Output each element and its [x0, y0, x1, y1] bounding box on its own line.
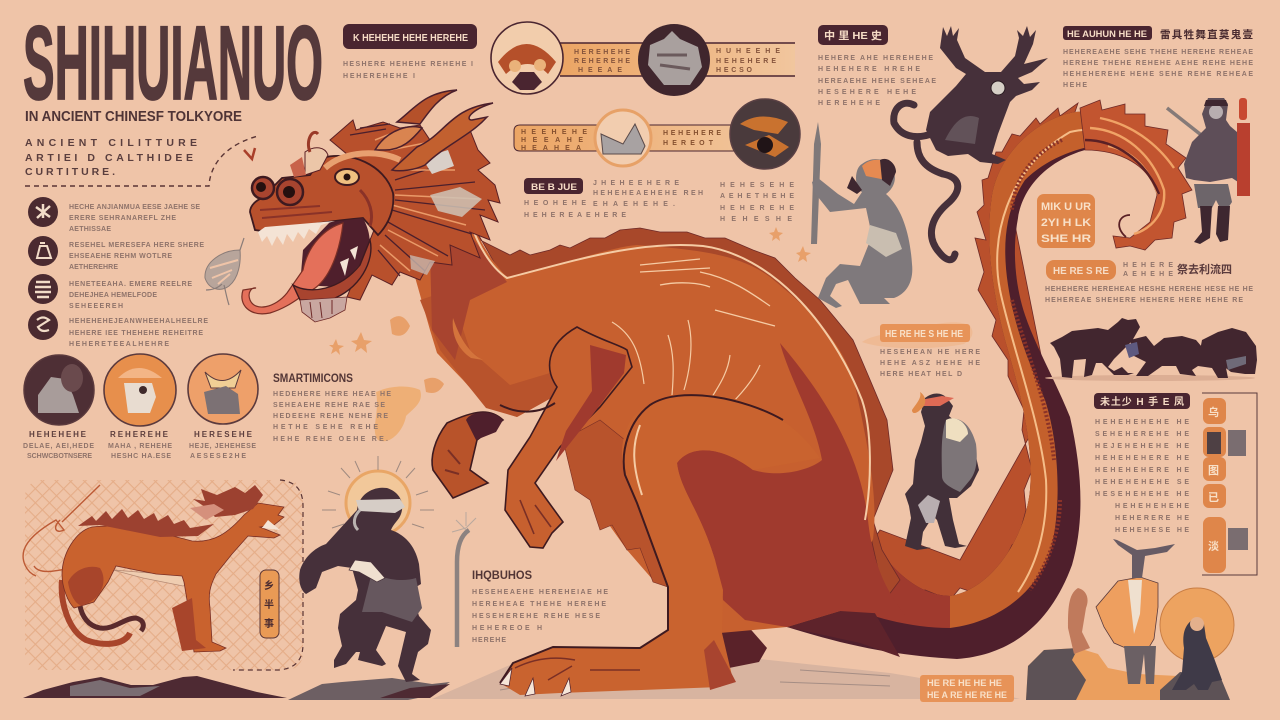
beast body — [62, 503, 284, 652]
seal tag: 乡 — [264, 579, 274, 592]
beast pale belly — [113, 550, 223, 586]
band: upper infographic: HEHEHERE — [716, 58, 776, 65]
icon: leaf sketch — [205, 238, 244, 305]
top centre label — [343, 24, 477, 80]
intro text: CURTITURE. — [25, 166, 115, 178]
text: item four: HEHEHEHEJEANWHEEHALHEELRE — [69, 318, 208, 325]
text group: centre notes: JHEHEEHERE — [593, 180, 679, 187]
panel: small beast — [23, 480, 303, 670]
text group: centre notes: AEHETHEHE — [720, 193, 794, 200]
bottom tag: HE RE HE HE HE — [927, 678, 1002, 688]
text: smartimicons: HEHE REHE OEHE RE. — [273, 436, 388, 443]
body shading — [430, 235, 905, 627]
text: smartimicons: SMARTIMICONS — [273, 373, 353, 385]
intro text — [25, 137, 197, 178]
icon: glyph — [28, 310, 58, 340]
text: item one — [69, 204, 200, 233]
text: inqbuhos: HESEHEREHE REHE HESE — [472, 613, 600, 620]
text: item two: RESEHEL MERESEFA HERE SHERE — [69, 242, 204, 249]
text: item three — [69, 281, 192, 310]
label: notes column: 未土少 H 手 E 凤 — [1100, 395, 1184, 408]
band: upper infographic: HEEAE — [578, 67, 622, 74]
label: caption blob: HERE HEAT HEL D — [880, 371, 962, 378]
text: item three: DEHEJHEA HEMELFODE — [69, 292, 157, 299]
text: smartimicons — [273, 373, 421, 443]
label: right notes: HE RE S RE — [1053, 265, 1109, 277]
figure body — [1184, 98, 1248, 244]
top centre label: HESHERE HEHEHE REHEHE I — [343, 61, 473, 68]
standing ape — [905, 392, 979, 550]
captions: SCHWCBOTNSERE — [27, 453, 92, 460]
intro text: ANCIENT CILITTURE — [25, 137, 197, 149]
text group: centre notes: HEHEREAEHERE — [524, 212, 626, 219]
label: right notes: HEHEHERE HEREHEAE HESHE HEREHE HESE HE HE — [1045, 286, 1253, 293]
text: right top: HEHEHERE HREHE — [818, 66, 920, 73]
text: SHIHUIANUO — [23, 5, 323, 122]
beast row — [1045, 318, 1257, 381]
text group: centre notes: HEOHEHE — [524, 200, 586, 207]
staff — [1167, 108, 1205, 138]
label: caption blob: HEHE ASZ HEHE HE — [880, 360, 980, 367]
tall figure — [1096, 539, 1175, 684]
tail tuft — [1080, 100, 1192, 250]
orange tag: MIK U UR — [1041, 201, 1091, 213]
orange tag — [1037, 194, 1095, 248]
curling tail — [894, 103, 958, 260]
label: notes column: HESEHEHEHE HE — [1095, 491, 1189, 498]
body light lines — [470, 222, 870, 520]
label: notes column: HEJEHEHEHE HE — [1095, 443, 1189, 450]
label: notes column: HEHEHEHEHE — [1115, 503, 1189, 510]
mouth — [258, 218, 370, 287]
monkey body — [812, 159, 912, 308]
icon: stack — [28, 274, 58, 304]
text: right top: HEREHE THEHE REHEHE AEHE REHE HEHE — [1063, 60, 1253, 67]
band: lower infographic — [514, 99, 800, 169]
label: caption blob — [862, 322, 980, 378]
black monkey top — [894, 26, 1048, 260]
icon strip: 已 — [1208, 491, 1219, 504]
text: inqbuhos: HESEHEAEHE HEREHEIAE HE — [472, 589, 608, 596]
ground — [432, 659, 1020, 699]
text: item three: SEHEEEREH — [69, 303, 123, 310]
icon: figure — [28, 197, 58, 227]
hind claws — [500, 668, 571, 696]
text group: centre notes: HEHESEHE — [720, 182, 794, 189]
subtitle: IN ANCIENT CHINESF TOLKYORE — [25, 109, 242, 125]
halo — [322, 456, 434, 535]
icon: vessel — [28, 236, 58, 266]
icon strip: 乌 — [1208, 405, 1219, 419]
figure — [299, 488, 431, 682]
halo figure — [299, 456, 434, 682]
intro text: ARTIEI D CALTHIDEE — [25, 152, 193, 164]
staff sketch — [452, 512, 476, 647]
medallion: grey creature — [638, 24, 710, 96]
orange tag: 2YI H LK — [1041, 217, 1091, 229]
seal tag: 半 — [264, 598, 274, 611]
medallion: white beast — [595, 110, 651, 166]
tail orange band — [840, 112, 1172, 628]
bottom tag: HE A RE HE RE HE — [927, 690, 1007, 700]
band: lower infographic: HEHEHERE — [663, 130, 721, 137]
text: item two: AETHEREHRE — [69, 264, 118, 271]
eye — [335, 169, 359, 185]
orange tag: SHE HR — [1041, 233, 1091, 245]
label: right notes: HEHERE — [1123, 262, 1173, 269]
nostrils — [252, 177, 303, 205]
icon strip — [1202, 393, 1257, 575]
beast tails — [62, 580, 143, 644]
captions: HEHEHEHE — [29, 430, 87, 439]
main dragon — [242, 90, 1192, 696]
label: right notes: 祭去利流四 — [1177, 262, 1232, 276]
label: notes column — [1094, 393, 1190, 534]
horns — [375, 90, 493, 171]
brow crest — [290, 132, 400, 177]
back foreleg — [432, 412, 503, 498]
text: right top: HEHE — [1063, 82, 1087, 89]
band: lower infographic: HEAHEA — [521, 145, 581, 152]
top centre label: HEHEREHEHE I — [343, 73, 415, 80]
text group: centre notes: HEHEHEAEHEHE REH — [593, 190, 703, 197]
captions: MAHA , REHEHE — [108, 443, 172, 450]
portrait: dark figure — [24, 355, 94, 425]
text: right top: HEREHEHE — [818, 100, 880, 107]
text: smartimicons: HETHE SEHE REHE — [273, 424, 378, 431]
dashed callout line — [25, 136, 258, 186]
captions: AESESE2HE — [190, 453, 246, 460]
text: item two — [69, 242, 204, 271]
label: right notes: AEHEHE — [1123, 271, 1173, 278]
label: right notes — [1045, 260, 1253, 304]
portrait: orange figure — [104, 354, 176, 426]
floating petals — [329, 227, 811, 393]
band: upper infographic: REHEREHE — [574, 58, 630, 65]
captions: DELAE, AEI,HEDE — [23, 443, 94, 450]
text: inqbuhos: HEREHEAE THEHE HEREHE — [472, 601, 606, 608]
front foreleg — [500, 327, 632, 548]
text group: centre notes: EHAEHEHE. — [593, 201, 675, 208]
mountains — [23, 676, 450, 700]
text: right top: HESEHERE HEHE — [818, 89, 916, 96]
label: caption blob: HESEHEAN HE HERE — [880, 349, 980, 356]
label: notes column: HEHEHESE HE — [1115, 527, 1189, 534]
rocks and ground — [1026, 588, 1230, 700]
band: lower infographic: HEREOT — [663, 140, 714, 147]
sun — [1160, 588, 1234, 662]
text group: centre notes — [524, 178, 794, 223]
band: upper infographic: HEREHEHE — [574, 49, 630, 56]
text: right top: HE AUHUN HE HE — [1067, 29, 1147, 40]
text: right top: HEHERE AHE HEREHEHE — [818, 55, 933, 62]
text: item four — [69, 318, 208, 348]
text: item three: HENETEEAHA. EMERE REELRE — [69, 281, 192, 288]
captions: HESHC HA.ESE — [111, 453, 171, 460]
text: inqbuhos: IHQBUHOS — [472, 568, 532, 582]
spear — [811, 122, 821, 244]
body — [413, 200, 874, 633]
label: notes column: HEHEHEHERE HE — [1095, 467, 1189, 474]
icon list — [28, 197, 208, 348]
standing figure — [1167, 98, 1250, 244]
tail fringe — [870, 103, 1078, 600]
lower jaw — [293, 240, 371, 300]
grey monkey with spear — [811, 122, 912, 308]
text: item two: EHSEAEHE REHM WOTLRE — [69, 253, 172, 260]
icon strip: 图 — [1208, 464, 1219, 477]
head — [242, 132, 400, 322]
seal tag — [260, 570, 279, 638]
chest fur — [420, 290, 668, 587]
beard — [300, 297, 347, 322]
label: notes column: HEHEHEHEHE SE — [1095, 479, 1189, 486]
hind leg — [500, 395, 820, 695]
text: item four: HEHERE IEE THEHEHE REHEITRE — [69, 330, 203, 337]
text: smartimicons: SEHEAEHE REHE RAE SE — [273, 402, 385, 409]
text: smartimicons: HEDEHERE HERE HEAE HE — [273, 391, 391, 398]
folk scene — [1026, 539, 1234, 700]
text group: centre notes: HEHEREHE — [720, 205, 794, 212]
text: right top — [818, 25, 1254, 107]
text: item one: AETHISSAE — [69, 226, 111, 233]
icon strip: 淡 — [1208, 540, 1219, 553]
child figure — [1172, 617, 1222, 690]
text: item one: ERERE SEHRANAREFL ZHE — [69, 215, 176, 222]
top centre label: K HEHEHE HEHE HEREHE — [353, 32, 468, 44]
medallion: dragon arch — [491, 22, 563, 94]
band: upper infographic — [491, 22, 795, 96]
text group: centre notes: BE B JUE — [531, 182, 577, 193]
tongue — [242, 223, 343, 314]
body and limbs — [926, 26, 1048, 164]
text: right top: HEHEREAEHE SEHE THEHE HEREHE REHEAE — [1063, 49, 1253, 56]
text: right top: HEHEHEREHE HEHE SEHE REHE REHEAE — [1063, 71, 1253, 78]
text: right top: 中 里 HE 史 — [824, 29, 883, 42]
tail highlight — [997, 130, 1166, 592]
far hind leg — [707, 560, 900, 668]
text: item four: HEHERETEEALHEHRE — [69, 341, 169, 348]
captions — [23, 430, 256, 460]
beast mane — [78, 485, 280, 537]
face — [250, 156, 393, 235]
tail dark band — [787, 112, 1170, 659]
text: inqbuhos — [472, 568, 608, 644]
label: notes column: HEHEHEHERE HE — [1095, 455, 1189, 462]
text: item one: HECHE ANJIANMUA EESE JAEHE SE — [69, 204, 200, 211]
text group: centre notes: HEHESHE — [720, 216, 792, 223]
tassel — [1237, 98, 1250, 196]
label: notes column: HEHEHEHEHE HE — [1095, 419, 1189, 426]
medallion: dark texture — [730, 99, 800, 169]
label: notes column: SEHEHEREHE HE — [1095, 431, 1189, 438]
portrait row — [23, 354, 258, 460]
mane — [330, 120, 500, 300]
label: notes column: HEHERERE HE — [1115, 515, 1189, 522]
seal tag: 事 — [264, 617, 274, 630]
text: right top: HEREAEHE HEHE SEHEAE — [818, 78, 936, 85]
back fur — [470, 220, 900, 600]
text: inqbuhos: HEREHE — [472, 637, 506, 644]
captions: HEJE, JEHEHESE — [189, 443, 256, 450]
band: upper infographic: HECSO — [716, 67, 753, 74]
text: right top: 雷具牲舞直莫鬼壹 — [1160, 28, 1254, 41]
captions: REHEREHE — [110, 430, 169, 439]
portrait: masked figure — [188, 354, 258, 424]
band: lower infographic: HEEAHE — [521, 137, 583, 144]
captions: HERESEHE — [194, 430, 253, 439]
label: caption blob: HE RE HE S HE HE — [885, 328, 963, 340]
bottom tag — [920, 675, 1014, 702]
beast ornament — [23, 485, 100, 576]
band: lower infographic: HEEHEHE — [521, 129, 587, 136]
text: smartimicons: HEDEEHE REHE NEHE RE — [273, 413, 388, 420]
band: upper infographic: HUHEEHE — [716, 48, 780, 55]
text: inqbuhos: HEHEREOE H — [472, 625, 542, 632]
label: right notes: HEHEREAE SHEHERE HEHERE HERE HEHE RE — [1045, 297, 1243, 304]
